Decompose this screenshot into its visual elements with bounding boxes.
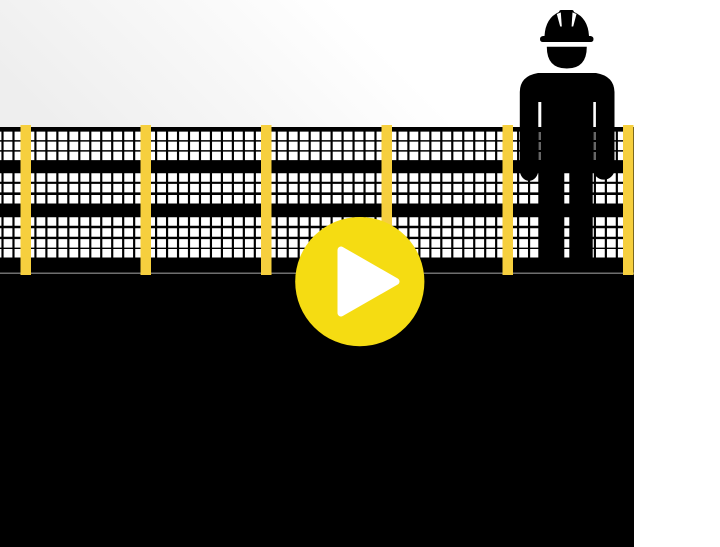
fence posts — [20, 125, 634, 275]
worker head — [547, 47, 587, 68]
worker body — [520, 73, 614, 258]
arm slits — [538, 102, 596, 160]
background gradient — [0, 0, 634, 127]
icon: construction worker — [520, 10, 614, 258]
ground block — [0, 257, 634, 547]
mesh fence — [0, 127, 634, 258]
worker hard hat — [540, 10, 594, 42]
play button — [295, 217, 424, 346]
